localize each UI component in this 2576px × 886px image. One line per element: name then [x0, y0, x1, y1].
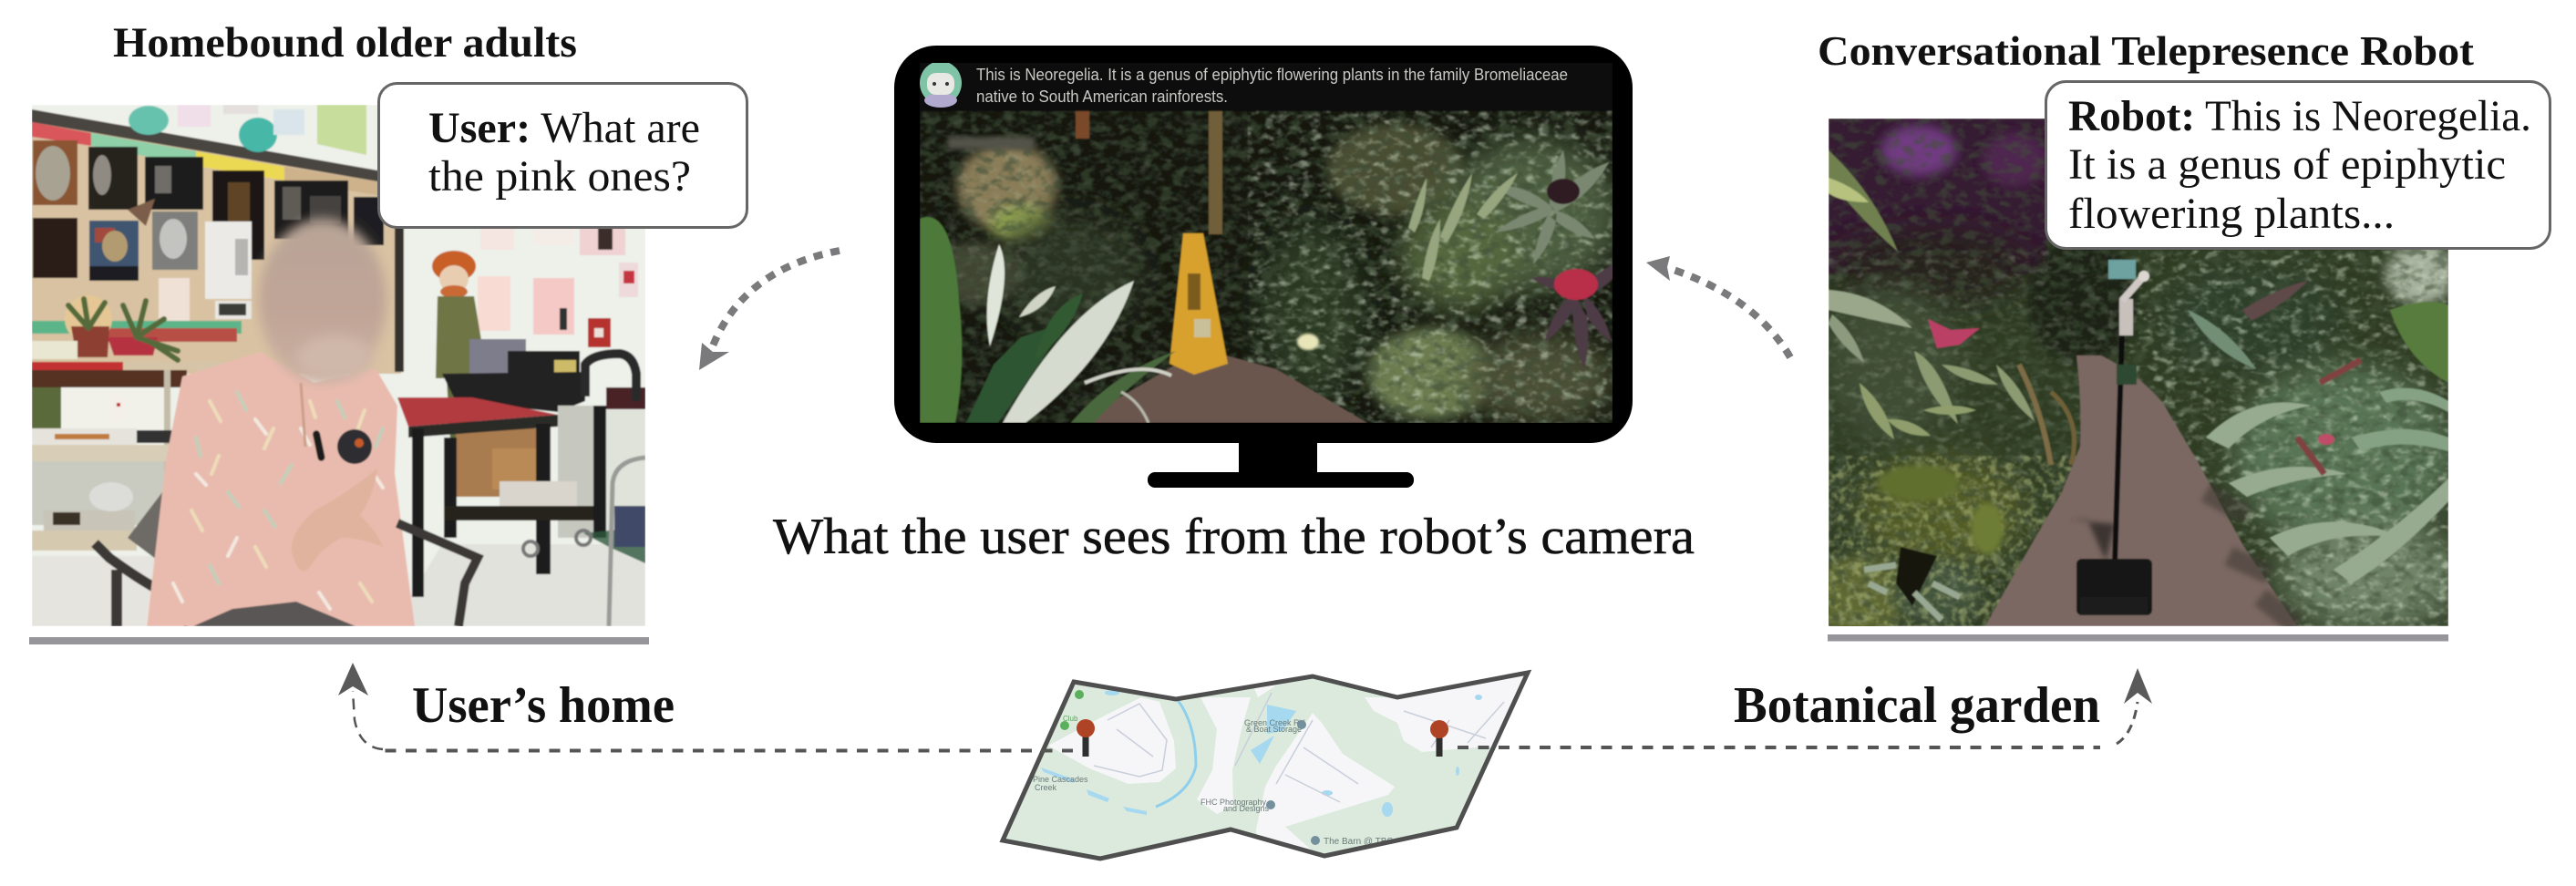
telepresence robot [2076, 260, 2152, 615]
speech bubble: robot: flowering plants... [2068, 190, 2395, 238]
bright plants right [1297, 150, 1627, 369]
place labels: Green Creek RV [1244, 718, 1304, 727]
on-screen caption [976, 67, 1568, 102]
person with blurred face [95, 219, 478, 626]
label: user's home: User’s home [412, 677, 675, 734]
place markers [1060, 690, 1320, 845]
robot avatar [920, 61, 962, 108]
speech bubble: user: the pink ones? [428, 152, 691, 201]
bulletin board [32, 105, 401, 374]
panel: botanical garden photo with robot [1814, 118, 2461, 638]
panel: user photo [32, 105, 645, 626]
place labels: The Barn @ TBS [1324, 837, 1393, 847]
hand [292, 469, 383, 572]
place labels: Club [1063, 715, 1078, 723]
speech bubble: user: User: What are [428, 104, 700, 152]
residential areas [1048, 673, 1528, 861]
place labels: Pine Cascades [1033, 775, 1088, 784]
grey base: botanical garden [1828, 634, 2448, 642]
heading: homebound older adults: Homebound older adults [113, 19, 577, 67]
speech bubble: robot: Robot: This is Neoregelia. [2068, 92, 2531, 140]
arrow: map to botanical garden [1458, 668, 2152, 747]
pin: botanical garden [1430, 720, 1448, 757]
scarecrow [431, 250, 481, 439]
label: botanical garden: Botanical garden [1734, 677, 2100, 734]
garden path [1985, 355, 2297, 626]
map [1003, 673, 1528, 861]
shelf with plants [32, 295, 246, 551]
pin: user's home [1077, 719, 1095, 757]
water [1041, 690, 1482, 817]
foreground leaves [920, 217, 1176, 423]
right ferns [2188, 281, 2448, 583]
arrow: map to user's home [338, 663, 1073, 751]
heading: conversational telepresence robot: Conversational Telepresence Robot [1818, 27, 2475, 74]
arrow: robot to camera feed [1646, 256, 1790, 357]
arrow: camera feed to user [699, 251, 840, 370]
place labels [1033, 715, 1393, 847]
left wall leaves [1829, 150, 2075, 620]
on-screen caption: native to South American rainforests. [976, 88, 1228, 106]
monitor [894, 46, 1633, 488]
streets [1094, 693, 1504, 802]
wall decorations [129, 105, 638, 347]
caption: what the user sees: What the user sees from the robot’s camera [773, 509, 1695, 565]
right side furniture [32, 339, 645, 626]
speech bubble: robot [2045, 82, 2550, 248]
speech bubble: robot: It is a genus of epiphytic [2068, 140, 2506, 189]
monitor screen: robot camera view [920, 61, 1627, 424]
place labels: Creek [1035, 783, 1057, 792]
speech bubble: user [379, 84, 747, 228]
place labels: and Designs [1223, 804, 1270, 813]
grey base: user home [29, 637, 649, 644]
on-screen caption: This is Neoregelia. It is a genus of epiphytic flowering plants in the family Bromeliaceae [976, 66, 1568, 84]
place labels: FHC Photography [1200, 798, 1267, 807]
stacks of discs [469, 339, 526, 376]
place labels: & Boat Storage [1246, 725, 1302, 734]
